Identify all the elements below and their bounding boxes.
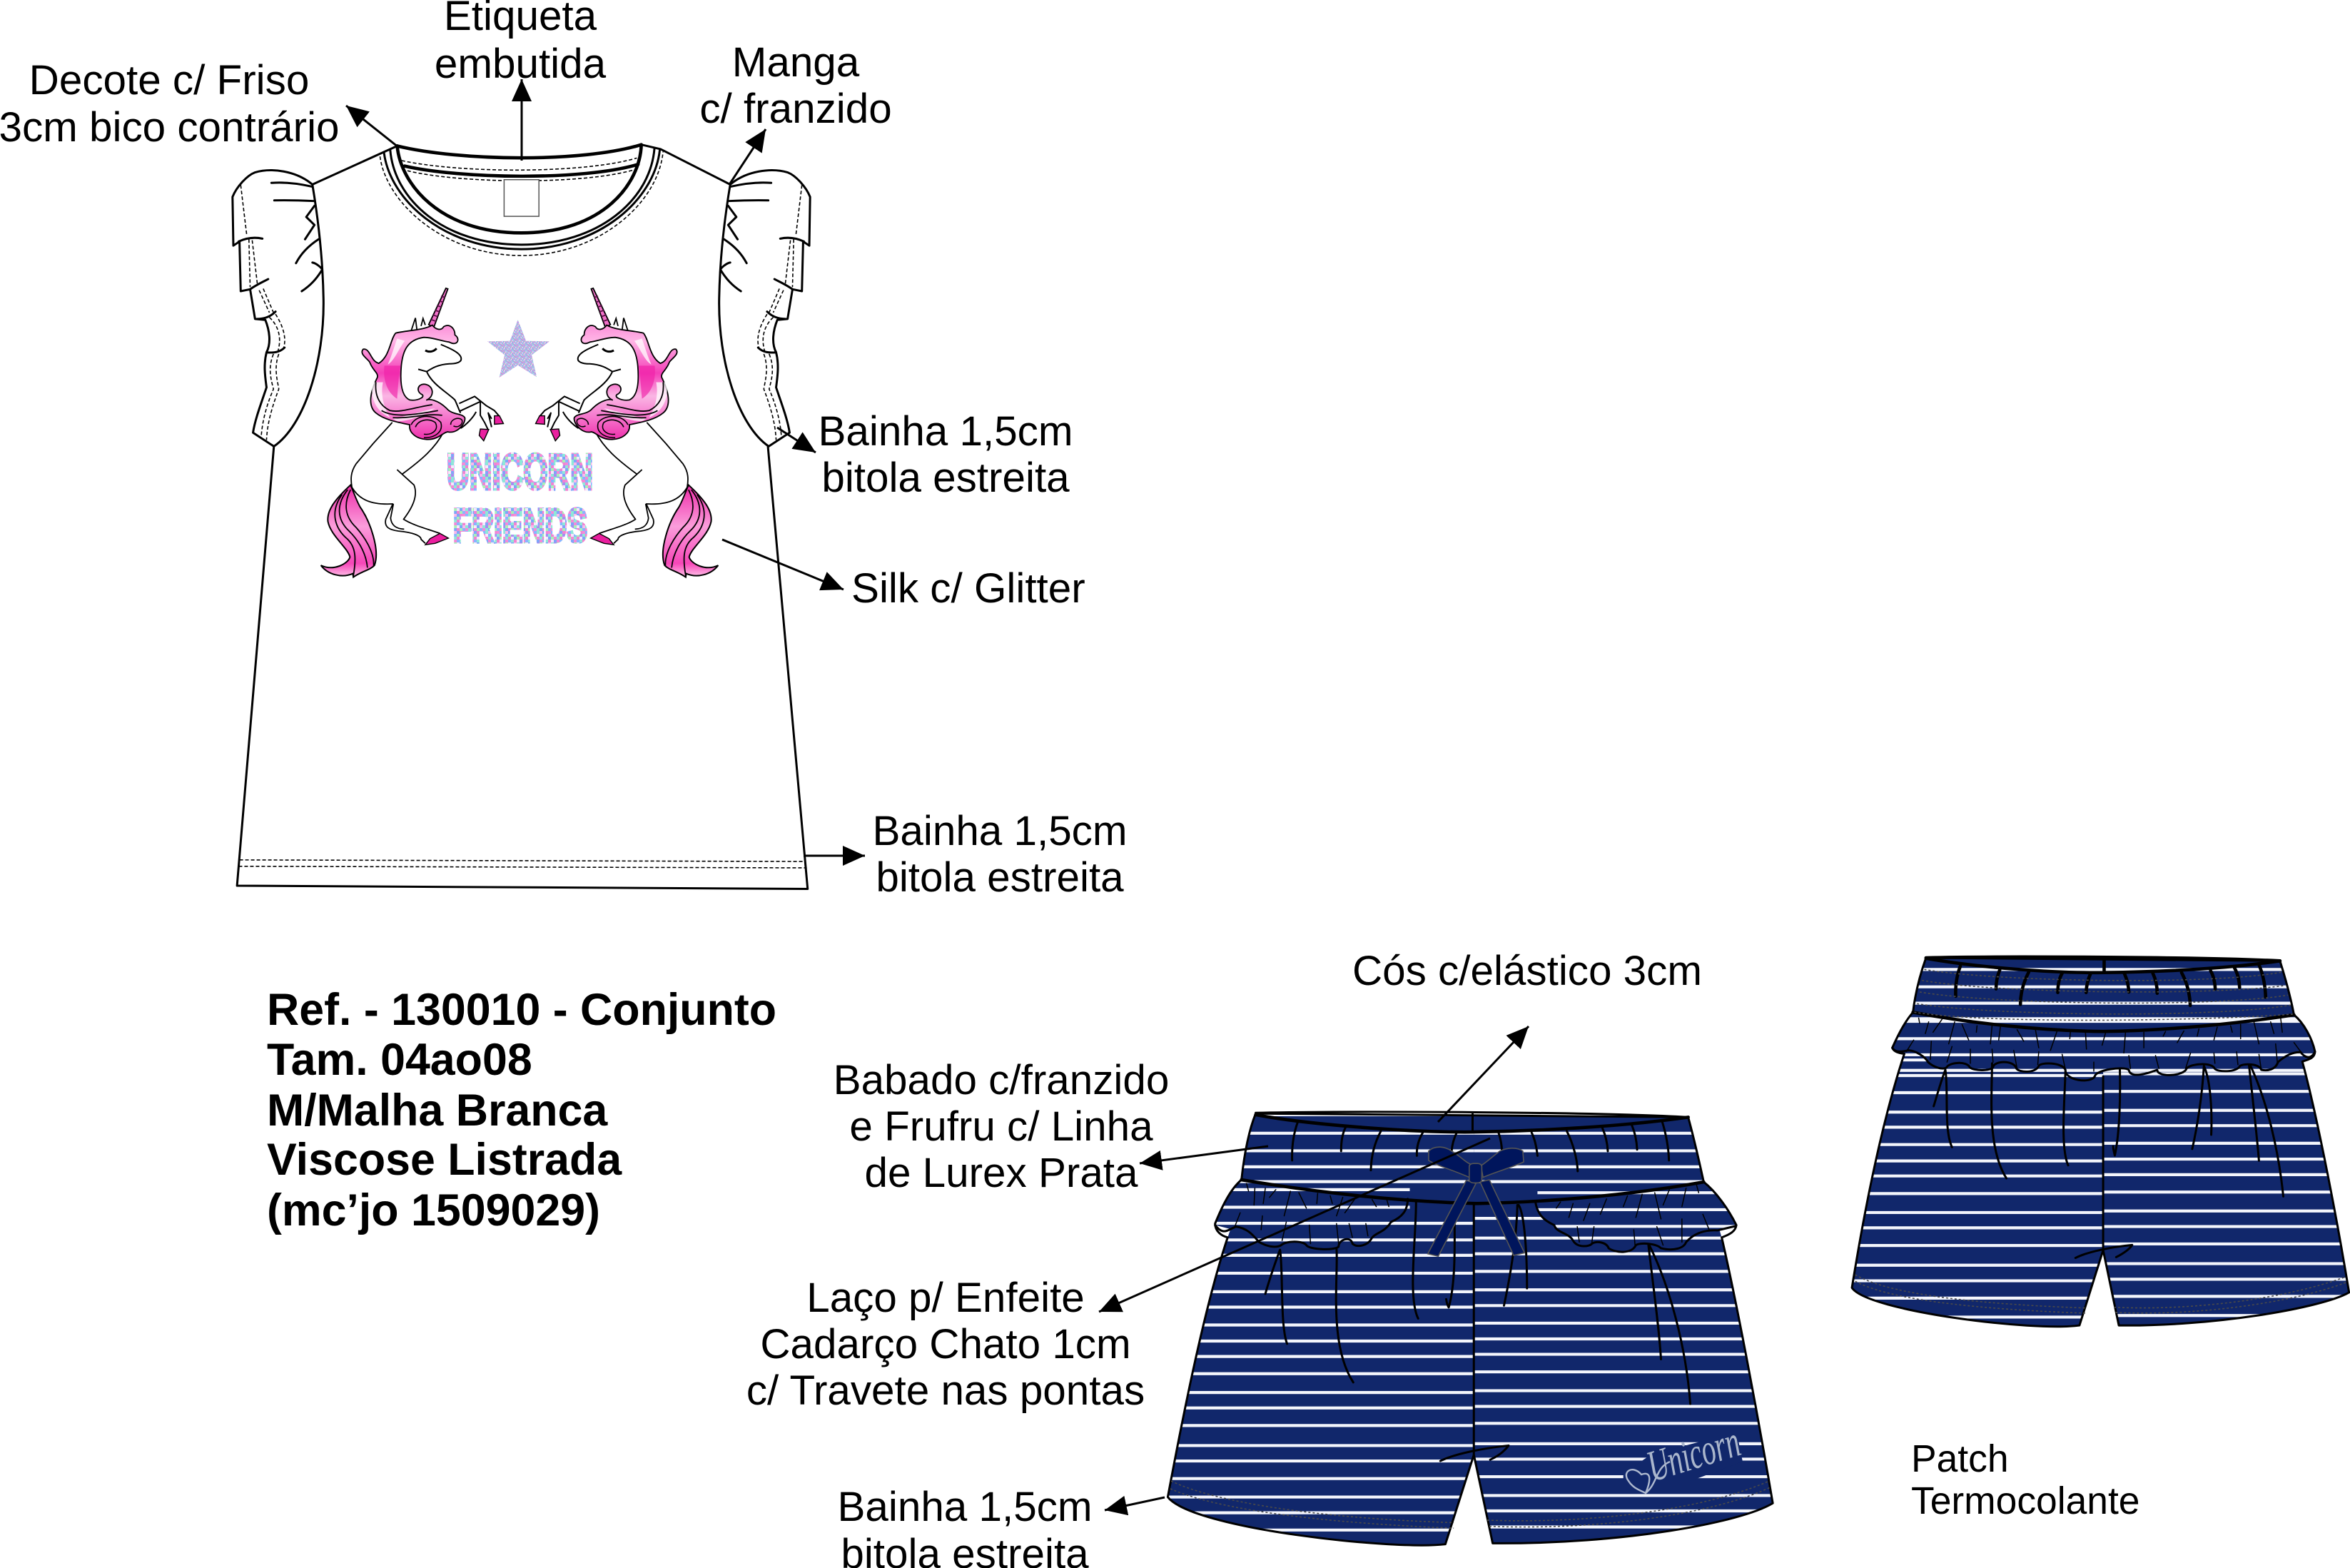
label: Bainha barra: bitola estreita bbox=[876, 854, 1124, 901]
right sleeve bbox=[719, 171, 810, 446]
text block: reference: M/Malha Branca bbox=[267, 1086, 608, 1135]
label: Laco: c/ Travete nas pontas bbox=[746, 1367, 1145, 1414]
patch: Unicorn glitter logo: Unicorn bbox=[1641, 1417, 1746, 1491]
label: Bainha manga: Bainha 1,5cm bbox=[818, 408, 1073, 455]
glitter star bbox=[487, 320, 549, 378]
label: Laco: Cadarço Chato 1cm bbox=[760, 1321, 1131, 1367]
patch backing bbox=[1624, 1441, 1743, 1480]
print: unicorn friends bbox=[321, 288, 718, 577]
right hip sliver bbox=[1720, 1226, 1736, 1238]
label: Bainha manga bbox=[818, 408, 1073, 501]
stripes bbox=[1827, 969, 2350, 1317]
ruffle edge bbox=[1893, 1048, 2315, 1081]
label: Bainha barra: Bainha 1,5cm bbox=[872, 808, 1128, 854]
label: Bainha manga: bitola estreita bbox=[821, 455, 1070, 501]
waist dotted lines bbox=[1914, 969, 2294, 1020]
panel: shorts back bbox=[1827, 957, 2350, 1327]
left sleeve bbox=[233, 171, 323, 446]
label: Silk: Silk c/ Glitter bbox=[851, 565, 1085, 612]
arrow: Bainha shorts bbox=[1105, 1497, 1165, 1510]
arrow: Laco bbox=[1099, 1138, 1490, 1312]
left hip sliver bbox=[1215, 1225, 1230, 1238]
waist elastic gathers bbox=[1292, 1122, 1669, 1171]
waist elastic gathers bbox=[1955, 966, 2266, 1006]
text block: reference bbox=[267, 985, 776, 1235]
label: Babado: de Lurex Prata bbox=[864, 1150, 1138, 1196]
arrow: Manga bbox=[730, 129, 766, 183]
right unicorn bbox=[536, 288, 718, 577]
arrow: Bainha barra bbox=[804, 855, 865, 856]
label: Cos: Cós c/elástico 3cm bbox=[1352, 948, 1702, 994]
label: Patch: Patch bbox=[1911, 1438, 2009, 1480]
stripes bbox=[1142, 1115, 1798, 1530]
label: Decote bbox=[0, 57, 340, 151]
drape creases bbox=[1265, 1202, 1691, 1404]
text block: reference: Ref. - 130010 - Conjunto bbox=[267, 985, 776, 1035]
left unicorn bbox=[321, 288, 503, 577]
collar bbox=[380, 145, 663, 256]
arrow: Bainha manga bbox=[777, 428, 816, 452]
label: Etiqueta bbox=[435, 0, 607, 87]
shirt body and side seams bbox=[237, 145, 808, 889]
panel: shorts front bbox=[1142, 1112, 1798, 1545]
ruffle left edge bbox=[1215, 1199, 1408, 1249]
label: Bainha shorts: Bainha 1,5cm bbox=[837, 1484, 1093, 1530]
shorts outlines bbox=[1852, 957, 2349, 1327]
label: Manga bbox=[699, 39, 892, 132]
shorts fabric bbox=[1168, 1113, 1773, 1545]
patch: Unicorn glitter logo bbox=[1626, 1417, 1746, 1493]
arrow: Etiqueta bbox=[521, 79, 522, 161]
arrow: Silk bbox=[722, 540, 844, 590]
label: Manga: Manga bbox=[732, 39, 860, 86]
arrow: Decote bbox=[346, 106, 398, 147]
glitter text UNICORN: UNICORN bbox=[447, 444, 593, 500]
label: Bainha shorts bbox=[837, 1484, 1093, 1568]
ruffle right edge bbox=[1535, 1202, 1736, 1252]
arrow: Babado bbox=[1140, 1146, 1268, 1163]
text block: reference: Tam. 04ao08 bbox=[267, 1035, 532, 1085]
label: Patch: Termocolante bbox=[1911, 1480, 2139, 1522]
text block: reference: Viscose Listrada bbox=[267, 1135, 622, 1185]
label: Laco: Laço p/ Enfeite bbox=[806, 1275, 1085, 1321]
label: Etiqueta: embutida bbox=[435, 41, 607, 87]
ruffle gathers bbox=[1235, 1183, 1709, 1245]
label: Patch bbox=[1911, 1438, 2139, 1522]
hem stitching bbox=[1170, 1481, 1771, 1528]
ruffle gathers bbox=[1906, 1018, 2301, 1071]
drape creases bbox=[1934, 1063, 2284, 1196]
glitter text FRIENDS: FRIENDS bbox=[453, 499, 587, 552]
hem stitching bbox=[1855, 1275, 2346, 1313]
shorts fabric bbox=[1852, 958, 2349, 1327]
label: Laco bbox=[746, 1275, 1145, 1414]
panel: t-shirt technical drawing bbox=[233, 145, 810, 889]
neck tag bbox=[504, 180, 539, 216]
text block: reference: (mc’jo 1509029) bbox=[267, 1185, 600, 1235]
label: Babado: e Frufru c/ Linha bbox=[849, 1103, 1153, 1150]
label: Babado bbox=[834, 1057, 1169, 1196]
hem stitching bbox=[238, 860, 807, 868]
arrow: Cos bbox=[1438, 1026, 1529, 1122]
label: Bainha barra bbox=[872, 808, 1128, 901]
label: Babado: Babado c/franzido bbox=[834, 1057, 1169, 1103]
drawstring bow bbox=[1428, 1147, 1524, 1256]
garment outline: t-shirt bbox=[233, 145, 810, 889]
label: Manga: c/ franzido bbox=[699, 86, 892, 132]
label: Decote: Decote c/ Friso bbox=[29, 57, 309, 103]
label: Decote: 3cm bico contrário bbox=[0, 104, 340, 151]
shorts outlines bbox=[1168, 1112, 1773, 1545]
